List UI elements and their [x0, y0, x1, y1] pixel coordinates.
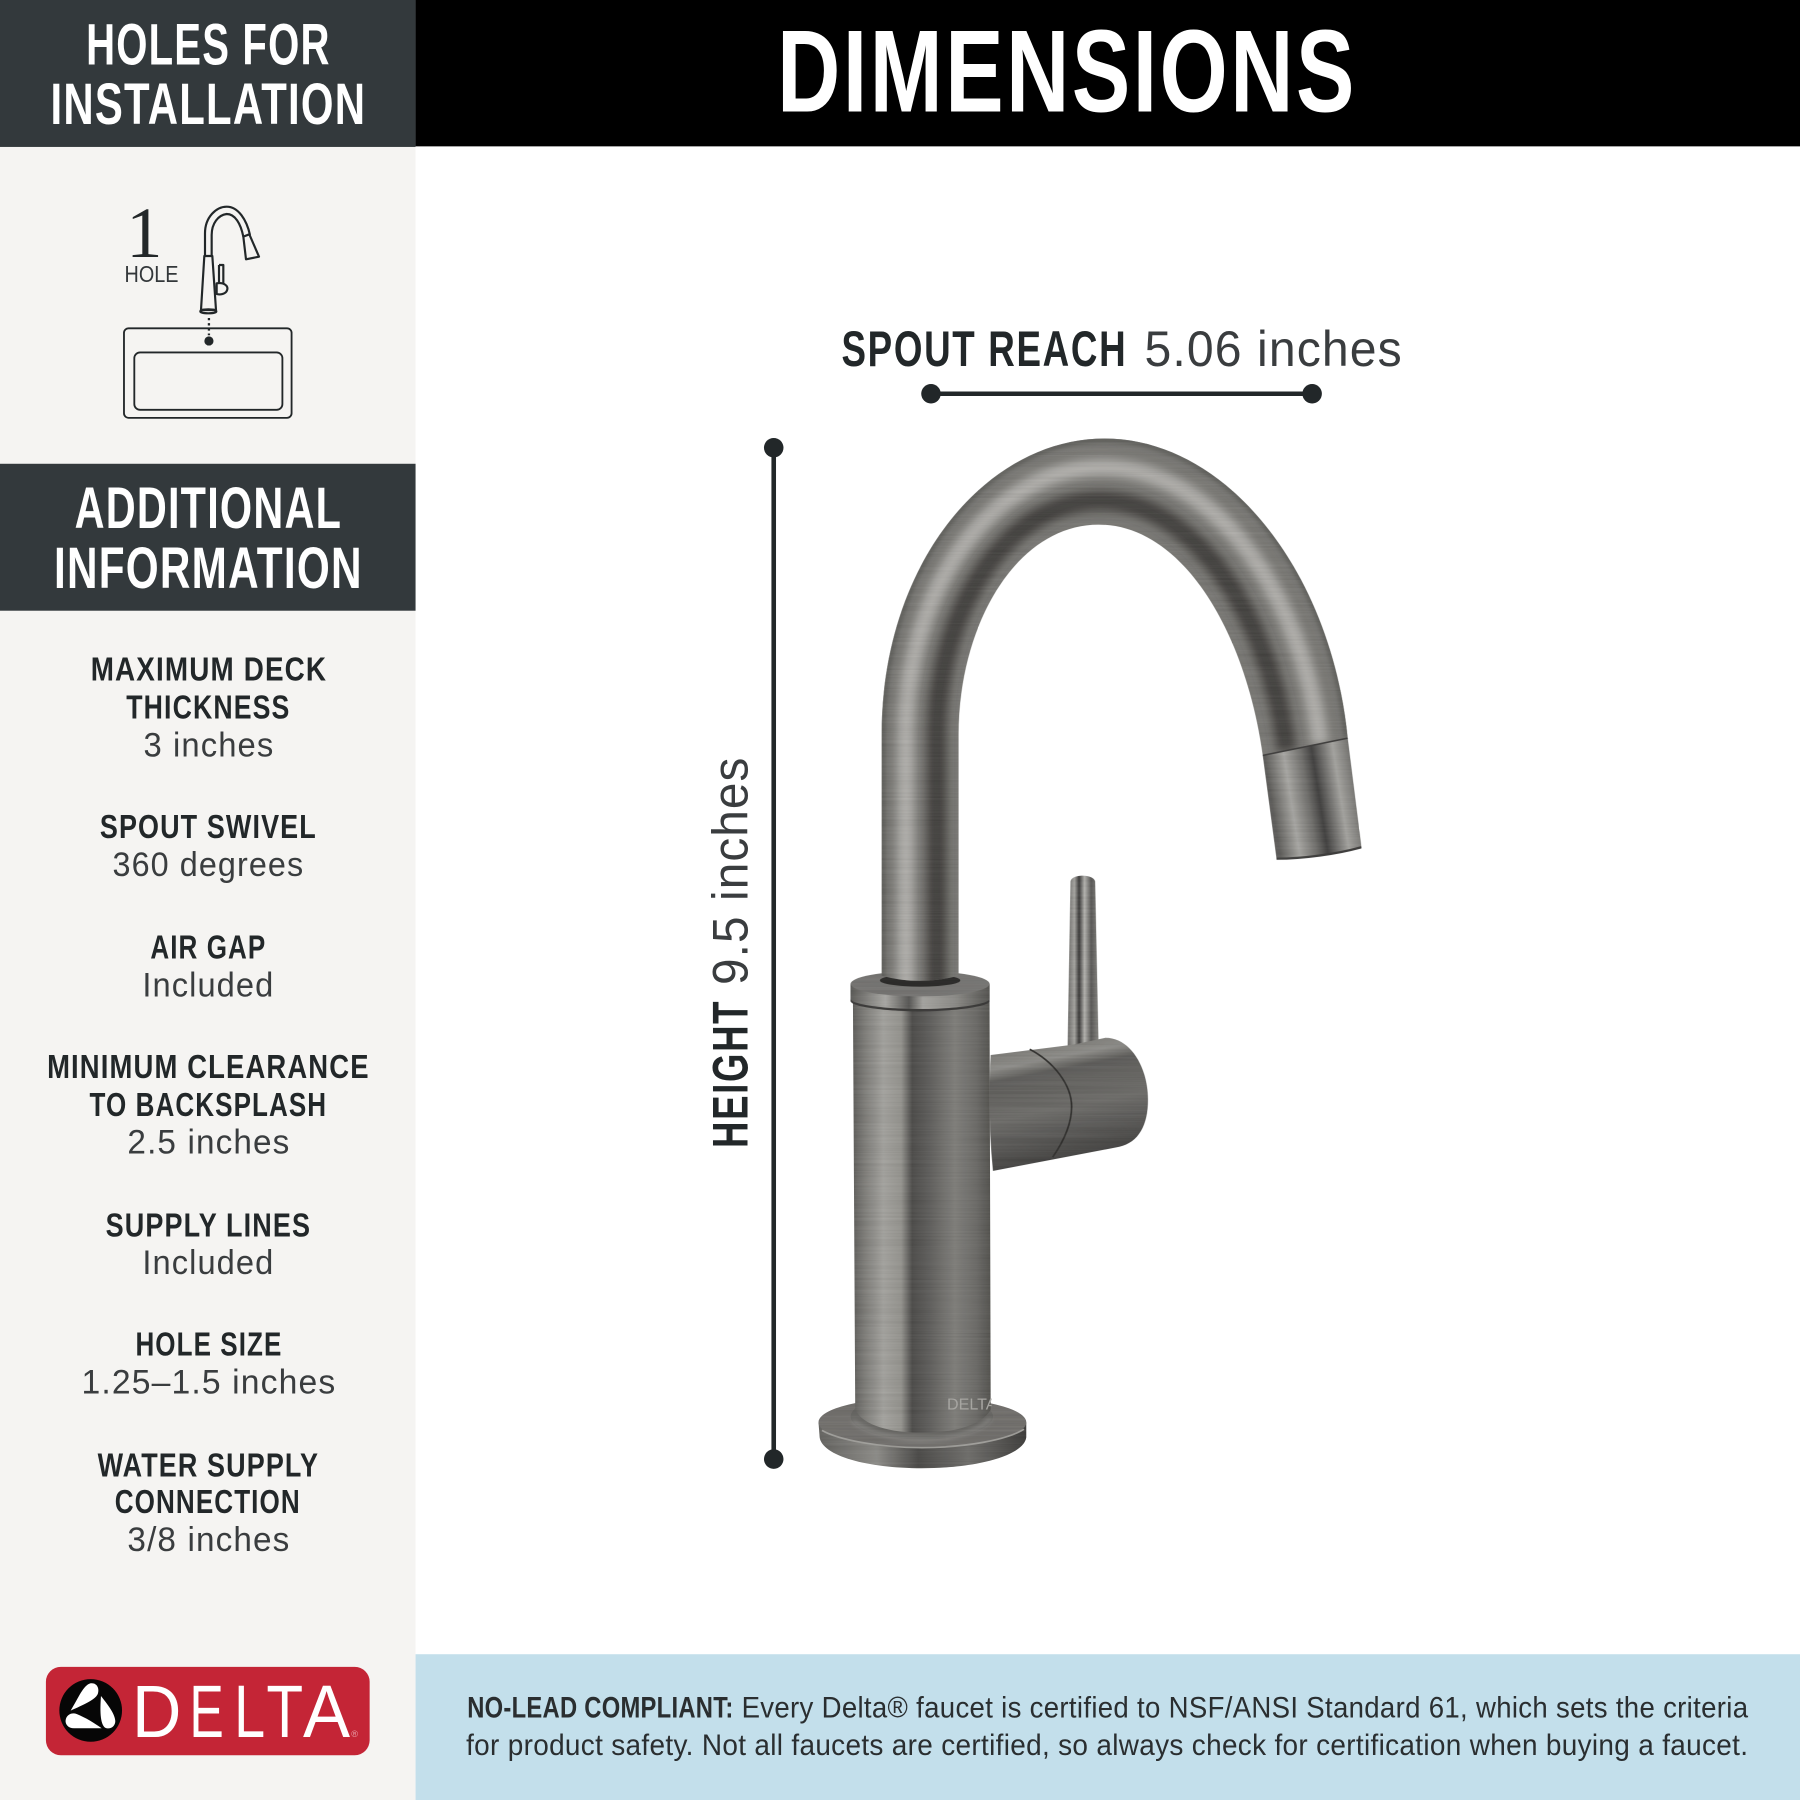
spec: water supply connection: 3/8 inches: [127, 1521, 290, 1559]
logo: delta: D: [132, 1669, 181, 1753]
spec: supply lines: [106, 1207, 311, 1282]
spec: spout swivel: [100, 809, 317, 884]
spec: water supply connection: WATER SUPPLY: [98, 1447, 319, 1484]
spec: spout swivel: 360 degrees: [113, 846, 304, 884]
icon: one hole faucet and sink: HOLE: [125, 261, 179, 287]
title bar: dimensions: DIMENSIONS: [777, 5, 1357, 136]
callout: no-lead compliant: for product safety. Not all faucets are certified, so always check for certification when buying a faucet.: [466, 1729, 1748, 1762]
spec: water supply connection: [98, 1447, 319, 1559]
faucet illustration: [818, 439, 1361, 1468]
heading: holes for installation: [0, 0, 416, 147]
spec: hole size: [82, 1327, 336, 1402]
spec: supply lines: Included: [142, 1244, 274, 1282]
faucet: lever rod: [1068, 876, 1099, 1047]
spec: air gap: Included: [142, 966, 274, 1004]
faucet: body cylinder: DELTA: [947, 1396, 997, 1414]
logo: delta: E: [189, 1669, 224, 1753]
dimension: spout reach: 5.06 inches: [1145, 320, 1403, 377]
heading: additional information: INFORMATION: [54, 536, 363, 601]
logo: delta: [46, 1667, 370, 1755]
spec: supply lines: SUPPLY LINES: [106, 1207, 311, 1244]
spec: water supply connection: CONNECTION: [115, 1484, 301, 1521]
spec: minimum clearance to backsplash: MINIMUM CLEARANCE: [47, 1049, 370, 1086]
spec: spout swivel: SPOUT SWIVEL: [100, 809, 317, 846]
icon: one hole faucet and sink: [124, 193, 292, 418]
spec: air gap: [142, 930, 274, 1004]
heading: additional information: [0, 464, 416, 611]
title bar: dimensions: [416, 0, 1800, 146]
heading: additional information: ADDITIONAL: [75, 476, 342, 541]
heading: holes for installation: HOLES FOR: [86, 12, 331, 77]
logo: delta: A: [303, 1669, 350, 1753]
spec: maximum deck thickness: [91, 652, 327, 765]
icon: one hole faucet and sink: 1: [126, 193, 162, 273]
dimension: height: [701, 438, 783, 1469]
dimension: height: 9.5 inches: [701, 757, 758, 985]
logo: delta: ®: [351, 1729, 358, 1739]
spec: hole size: HOLE SIZE: [135, 1327, 282, 1364]
callout: no-lead compliant: [416, 1654, 1800, 1800]
spec: minimum clearance to backsplash: 2.5 inches: [127, 1124, 290, 1162]
spec: minimum clearance to backsplash: [47, 1049, 370, 1162]
logo: delta: T: [266, 1669, 303, 1753]
faucet: spout tube: [880, 439, 1348, 999]
heading: holes for installation: INSTALLATION: [51, 72, 366, 137]
spec: minimum clearance to backsplash: TO BACKSPLASH: [90, 1087, 327, 1124]
spec: hole size: 1.25–1.5 inches: [82, 1364, 336, 1402]
faucet: side handle: [989, 1038, 1148, 1171]
faucet: collar: [851, 971, 990, 1011]
panel: left sidebar: [0, 0, 416, 1800]
faucet: pull-down spray head: [1263, 738, 1361, 859]
dimension: height: HEIGHT: [701, 1000, 758, 1148]
spec: maximum deck thickness: MAXIMUM DECK: [91, 652, 327, 689]
callout: no-lead compliant: NO-LEAD COMPLIANT:: [467, 1691, 734, 1724]
spec: maximum deck thickness: THICKNESS: [126, 690, 290, 727]
dimension: spout reach: SPOUT REACH: [841, 320, 1127, 377]
dimension: spout reach: [841, 320, 1403, 404]
faucet: base flange: [818, 1394, 1026, 1468]
spec: maximum deck thickness: 3 inches: [143, 727, 274, 765]
faucet: body cylinder: [853, 1001, 997, 1433]
logo: delta: L: [234, 1669, 265, 1753]
spec: air gap: AIR GAP: [150, 930, 266, 967]
callout: no-lead compliant: Every Delta® faucet is certified to NSF/ANSI Standard 61, which sets the criteria: [742, 1691, 1748, 1724]
